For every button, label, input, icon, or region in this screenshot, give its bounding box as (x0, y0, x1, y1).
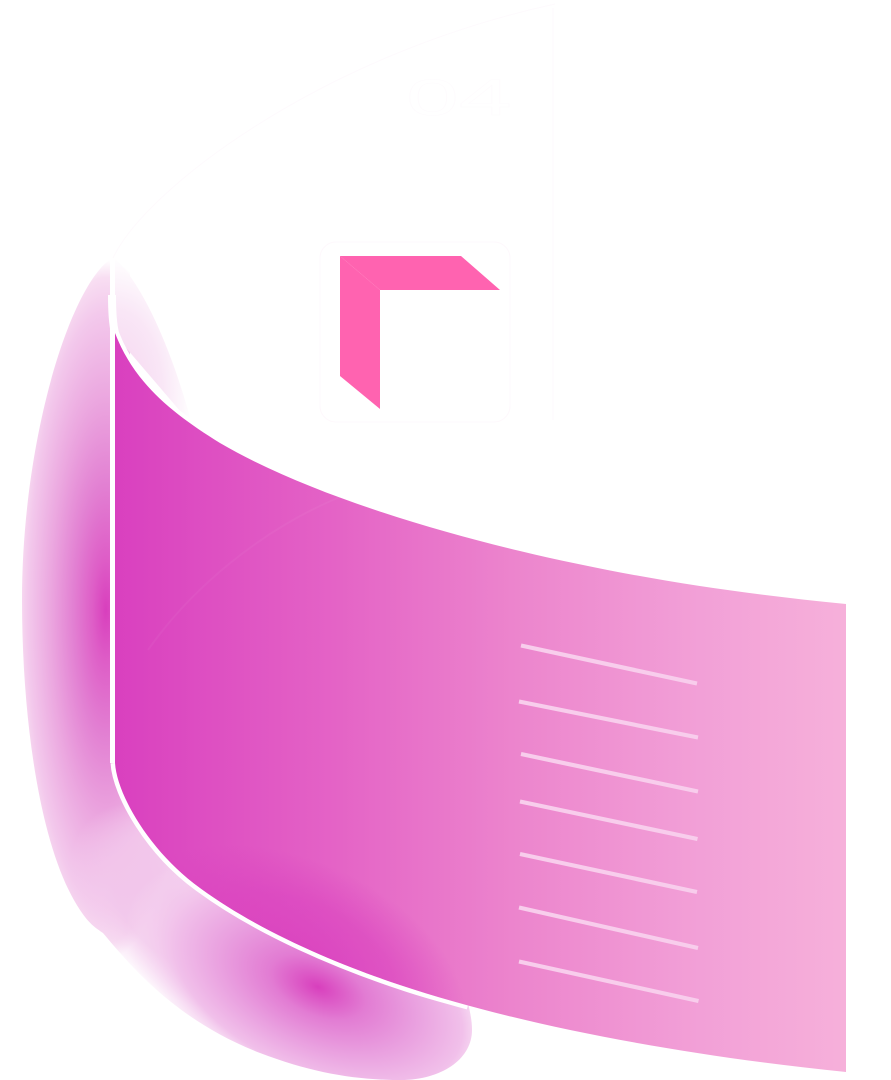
left and lower glow shadow (22, 264, 472, 1080)
icon: pink cube corner (320, 242, 510, 422)
diagonal text lines (519, 646, 698, 1001)
white band border (112, 258, 468, 1005)
band inner shading (182, 873, 448, 1000)
pale middle glow (90, 813, 199, 978)
dark lower glow (150, 898, 472, 1080)
icon frame (320, 242, 510, 422)
curved pink band panel (115, 333, 846, 1072)
top glow behind band edge (114, 258, 192, 425)
left glow (22, 264, 150, 950)
cube top face (340, 256, 500, 290)
section number 04: 04 (406, 70, 512, 126)
faint outline of the white top disc (113, 4, 555, 420)
cube left face (340, 256, 380, 409)
faint arc across band (148, 497, 340, 650)
